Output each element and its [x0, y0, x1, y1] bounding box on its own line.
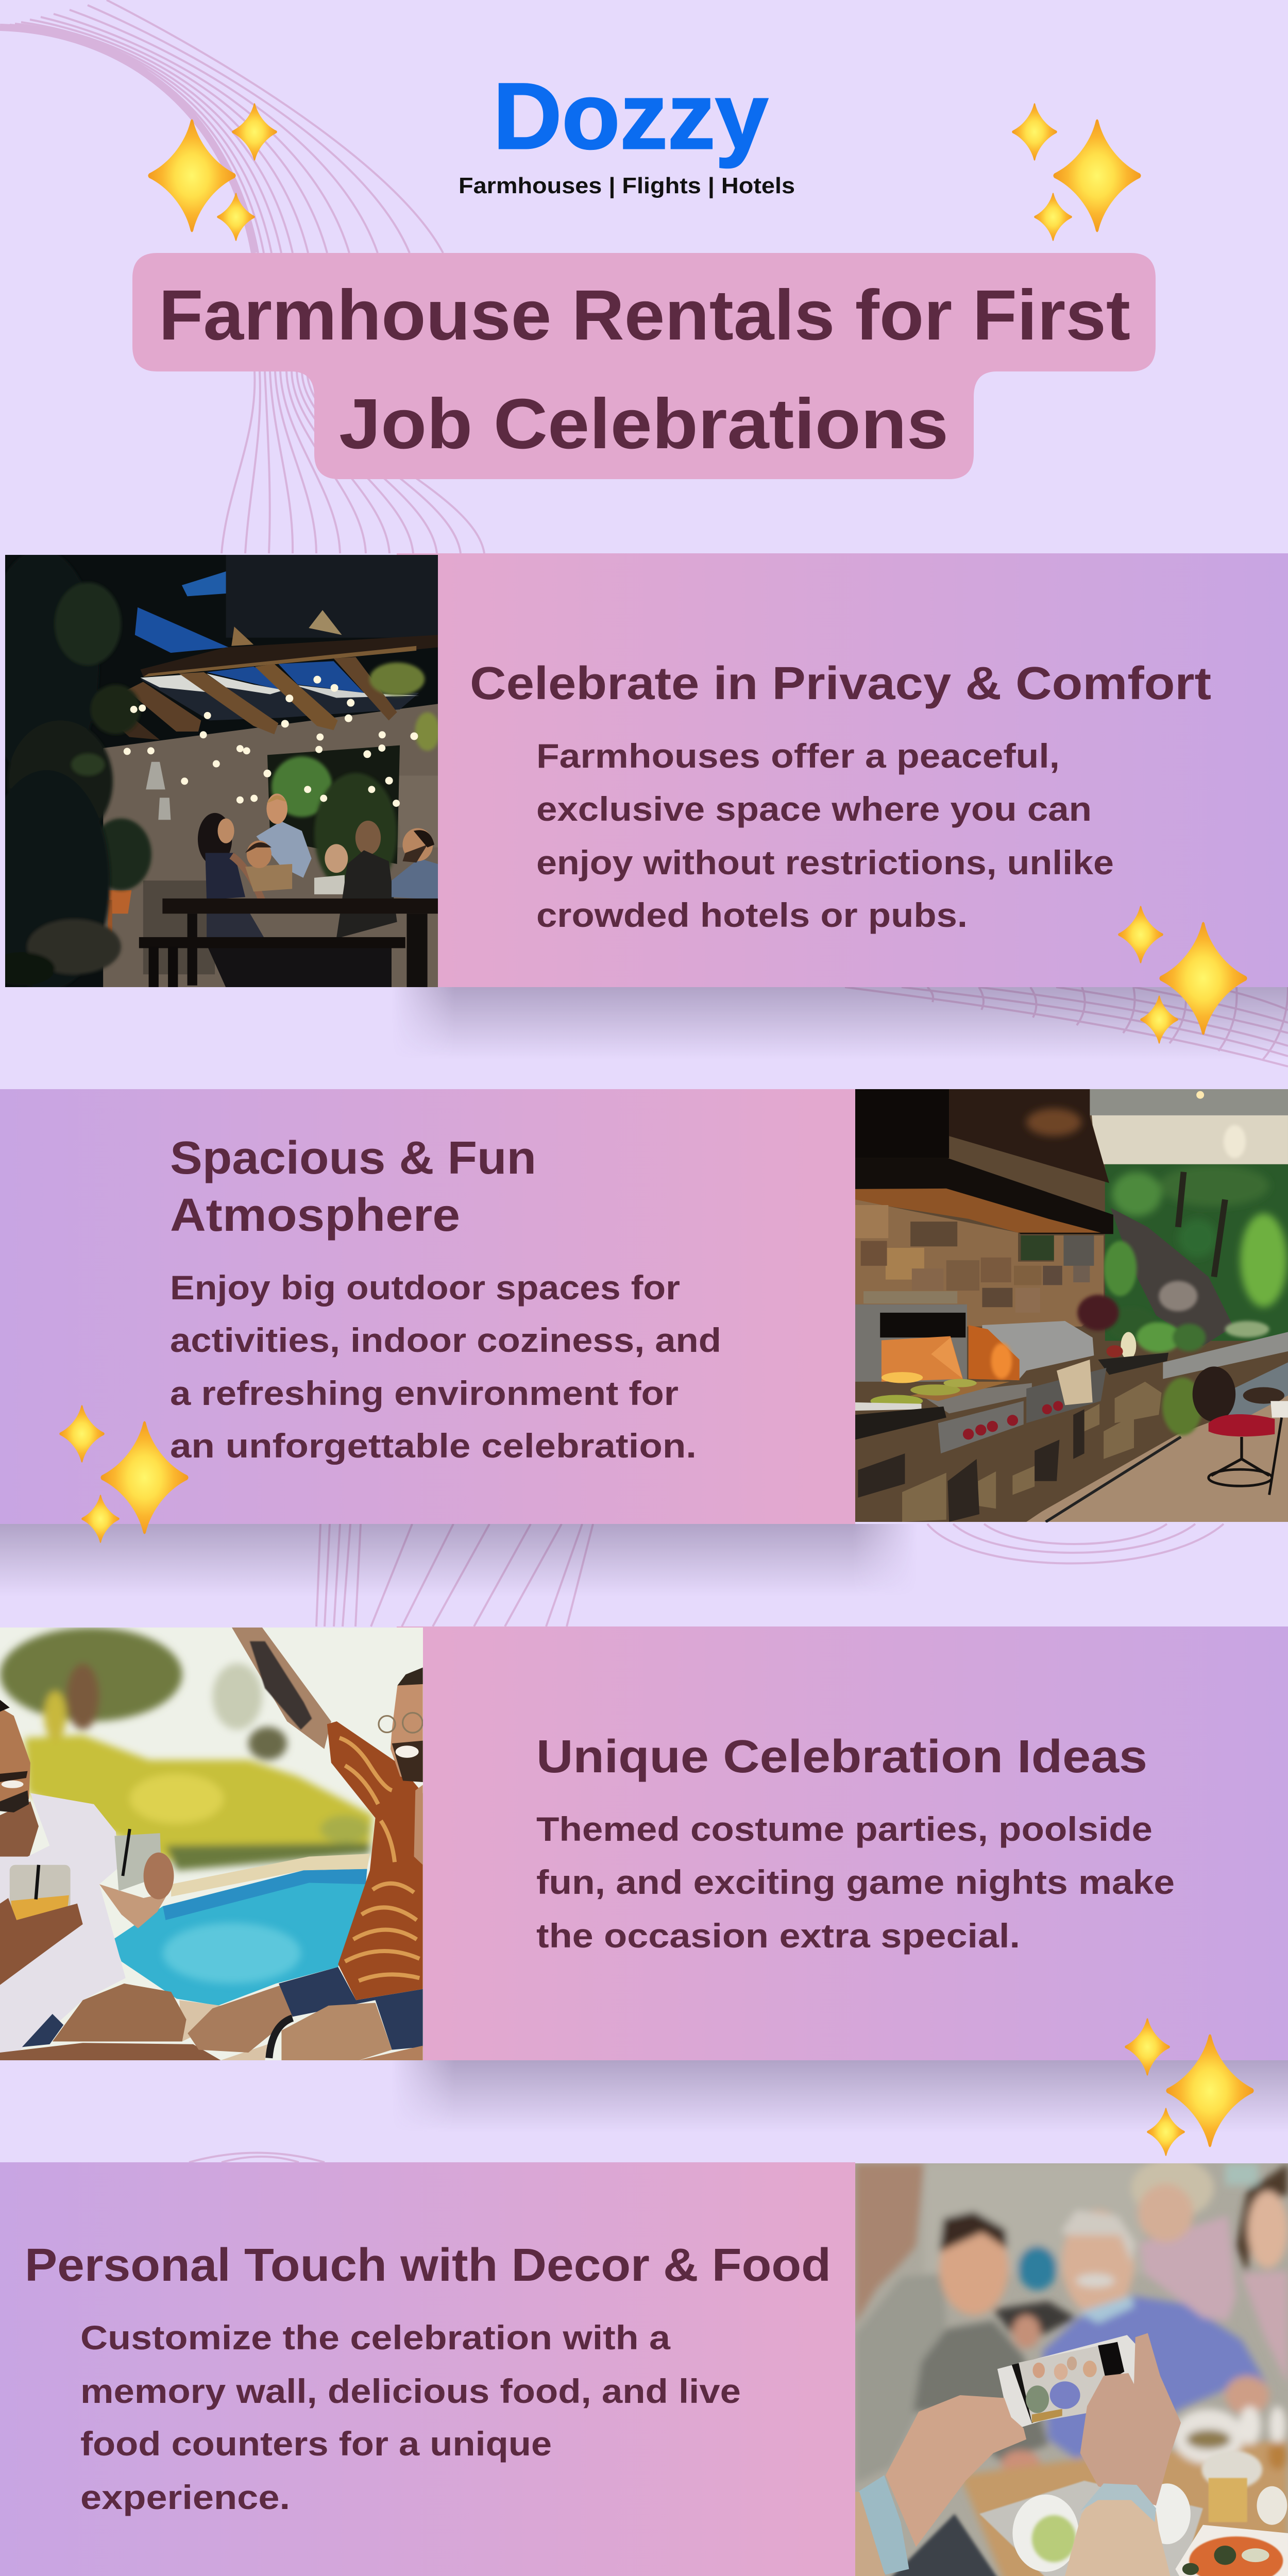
photo: family selfie with phone: [855, 2158, 1288, 2576]
title: Farmhouse Rentals for First: [159, 276, 1130, 355]
icon: sparkles: [1118, 906, 1247, 1044]
logo: Farmhouses | Flights | Hotels: [459, 173, 795, 199]
heading: Celebrate in Privacy & Comfort: [470, 658, 1211, 709]
panel: unique celebration ideas: [0, 1626, 1288, 2156]
icon: sparkles right: [1012, 103, 1141, 241]
decorative wave lines: header arcs: [0, 0, 484, 553]
body text: [170, 1268, 721, 1465]
photo: night pergola party: [0, 549, 440, 991]
body text: Themed costume parties, poolside: [536, 1810, 1153, 1848]
logo: [459, 63, 795, 199]
panel: celebrate in privacy: [0, 549, 1288, 1059]
heading: Atmosphere: [170, 1190, 460, 1241]
photo: poolside party: [0, 1628, 433, 2060]
decorative wave lines: between panels 2 and 3: [189, 1524, 1224, 2162]
decorative wave lines: mesh below panel 1: [845, 987, 1288, 1066]
body text: experience.: [80, 2478, 290, 2516]
body text: memory wall, delicious food, and live: [80, 2372, 741, 2410]
body text: [536, 1810, 1175, 1955]
body text: food counters for a unique: [80, 2425, 552, 2463]
title: [132, 253, 1156, 479]
logo: Dozzy: [493, 63, 768, 168]
body text: a refreshing environment for: [170, 1374, 679, 1412]
panel: personal touch: [0, 2158, 1288, 2576]
icon: sparkles left: [148, 103, 277, 241]
body text: an unforgettable celebration.: [170, 1427, 697, 1465]
photo: outdoor kitchen: [855, 1089, 1288, 1522]
body text: Farmhouses offer a peaceful,: [536, 737, 1060, 775]
body text: the occasion extra special.: [536, 1917, 1020, 1955]
heading: Unique Celebration Ideas: [536, 1731, 1147, 1783]
heading: Spacious & Fun: [170, 1132, 536, 1184]
body text: Enjoy big outdoor spaces for: [170, 1268, 680, 1307]
body text: exclusive space where you can: [536, 790, 1092, 828]
body text: crowded hotels or pubs.: [536, 896, 968, 934]
body text: [536, 737, 1114, 934]
heading: [170, 1132, 536, 1241]
icon: sparkles: [1125, 2018, 1254, 2156]
body text: [80, 2318, 741, 2516]
body text: fun, and exciting game nights make: [536, 1863, 1175, 1901]
body text: activities, indoor coziness, and: [170, 1321, 721, 1359]
panel: spacious and fun: [0, 1089, 1288, 1596]
title: Job Celebrations: [339, 384, 948, 464]
heading: Personal Touch with Decor & Food: [25, 2240, 831, 2291]
icon: sparkles: [59, 1405, 189, 1543]
body text: Customize the celebration with a: [80, 2318, 671, 2357]
body text: enjoy without restrictions, unlike: [536, 843, 1114, 882]
